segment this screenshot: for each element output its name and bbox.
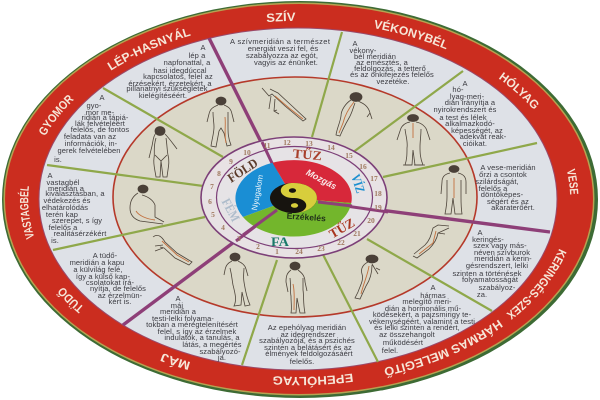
- text: hármas melegítő: működésért: [383, 338, 424, 347]
- text: epehólyag: [259, 323, 355, 366]
- figure: keringés arm: [413, 225, 449, 258]
- text: vese: ségért és az: [487, 197, 529, 206]
- text: hármas melegítő: felel.: [382, 346, 398, 355]
- text: hólyag: [433, 79, 507, 148]
- text: hólyag: nyirokrendszert és: [433, 105, 497, 114]
- text: gyomor: információk, in-: [65, 139, 118, 148]
- text: epehólyag: szinten a belátásért és az: [264, 343, 352, 352]
- text: vékonybél: bél meridián: [354, 52, 396, 61]
- hour numbers: 8: [217, 169, 221, 178]
- text: máj: testi-lelki folyama-: [152, 314, 214, 323]
- text: szív: vagyis az énünket.: [254, 58, 318, 67]
- text: vastagbél: is.: [51, 236, 59, 245]
- text: gyomor: gyo-: [86, 101, 102, 110]
- text: gyomor: feladata van az: [64, 132, 116, 141]
- text: máj: felel, s így az érzelmek: [158, 327, 236, 336]
- outer ring organ names: GYOMOR: [39, 95, 74, 135]
- outer ring organ names: VASTAGBÉL: [18, 186, 34, 240]
- figure: szív arm: [262, 88, 306, 121]
- text: szív: energiát veszi fel, és: [248, 44, 318, 53]
- hour numbers: 1: [275, 247, 279, 256]
- text: keringés-szex: szinten a történések: [452, 269, 522, 278]
- text: vastagbél: elhatárolódás: [42, 203, 88, 212]
- text: tüdő: az érzelmün-: [98, 291, 143, 300]
- text: vese: akaraterőért.: [491, 203, 535, 212]
- wedge: Érzékelés: [243, 198, 351, 237]
- text: vese: szilárdságát,: [475, 177, 519, 186]
- text: máj: szabályozó-: [199, 347, 241, 356]
- text: vékonybél: és az önkifejezés felelős: [350, 70, 434, 79]
- text: hólyag: lyag-meri-: [450, 92, 485, 101]
- text: gyomor: mor me-: [86, 108, 115, 117]
- text: vastagbél: felelős a: [49, 223, 78, 232]
- wedge: Mozgás: [272, 160, 352, 203]
- text: vese: A vese-meridián: [480, 163, 536, 172]
- element names: TŰZ: [326, 215, 357, 241]
- text: tüdő: nyítja, de felelős: [90, 284, 146, 293]
- text: hármas melegítő: A: [430, 283, 436, 292]
- text: hármas melegítő: és lelki szinten a rendért,: [374, 323, 460, 332]
- hour numbers: 5: [211, 210, 215, 219]
- text: gyomor: gerek felvételében: [57, 146, 121, 155]
- text: vékonybél: feldolgozás, a tetterő: [354, 64, 426, 73]
- element names: VÍZ: [348, 172, 368, 195]
- text: epehólyag: élmények feldolgozásáért: [265, 349, 354, 358]
- text: gyomor: lák felvételéért: [75, 119, 126, 128]
- text: hólyag: cióikat.: [463, 139, 487, 148]
- text: vékonybél: az emésztés, a: [356, 58, 409, 67]
- text: vékonybél: vezetéke.: [376, 77, 410, 86]
- text: vékonybél: vékony-: [350, 46, 377, 55]
- text: vese: felelős a: [479, 184, 508, 193]
- text: vastagbél: védekezés és: [43, 196, 91, 205]
- text: epehólyag: szabályozója, és a pszichés: [259, 336, 355, 345]
- element names: FÉM: [219, 196, 243, 224]
- hour numbers: 17: [370, 174, 378, 183]
- text: hólyag: a test és lélek: [439, 113, 487, 122]
- text: gyomor: is.: [54, 155, 62, 164]
- text: hármas melegítő: ködésekért, a pajzsmirigy te-: [373, 310, 472, 319]
- element ring: [216, 146, 372, 248]
- figure: gyomor: [149, 126, 177, 177]
- outer ring organ names: LÉP-HASNYÁL: [107, 28, 191, 70]
- text: hármas melegítő: dián a hormonális mű-: [385, 304, 462, 313]
- hour numbers: 23: [317, 244, 325, 253]
- hour numbers: 2: [256, 242, 260, 251]
- figure: epehólyag: [286, 262, 307, 313]
- text: gyomor: ridián a tápiá-: [82, 113, 129, 122]
- text: máj: indulatok, a tanulás, a: [164, 333, 240, 342]
- text: hólyag: képességét, az: [451, 126, 503, 135]
- hour numbers: 7: [210, 182, 214, 191]
- text: tüdő: a külvilág felé,: [73, 265, 123, 274]
- text: lép-hasnyál: érzésekért, érzetekért, a: [128, 79, 212, 88]
- text: lép-hasnyál: pillanatnyi szükségletek: [126, 84, 208, 93]
- text: vastagbél: terén kap: [46, 210, 78, 219]
- text: hólyag: dián irányítja a: [445, 98, 496, 107]
- panel: beige figure ring: [113, 77, 477, 317]
- hour numbers: 22: [337, 238, 345, 247]
- element names: FA: [271, 234, 290, 249]
- text: szív: A szívmeridián a természet: [230, 37, 331, 46]
- outer ring organ names: MÁJ: [160, 354, 190, 370]
- outer ring organ names: VÉKONYBÉL: [375, 20, 446, 50]
- text: máj: A: [175, 294, 181, 303]
- text: keringés-szex: meridián a kerin-: [474, 254, 532, 263]
- text: vastagbél: [42, 171, 107, 245]
- text: gyomor: felelős, de fontos: [71, 125, 129, 134]
- text: hólyag: adekvát reak-: [460, 132, 507, 141]
- text: keringés-szex: keringés-: [472, 235, 504, 244]
- hour numbers: 19: [374, 203, 382, 212]
- hour numbers: 13: [305, 139, 313, 148]
- hour numbers: 21: [353, 229, 361, 238]
- text: hólyag: A: [462, 79, 468, 88]
- text: epehólyag: az idegrendszer: [281, 330, 336, 339]
- hour numbers: 24: [295, 247, 303, 256]
- text: keringés-szex: szex vagy más-: [473, 241, 527, 250]
- text: hármas melegítő: [369, 283, 475, 355]
- text: gyomor: [54, 93, 129, 164]
- element names: FÖLD: [225, 155, 260, 186]
- text: szív: szabályozza az egót,: [246, 51, 318, 60]
- text: hármas melegítő: melegítő meri-: [402, 297, 452, 306]
- number ring: [201, 137, 387, 258]
- text: vékonybél: A: [352, 39, 358, 48]
- text: vékonybél: [350, 39, 434, 86]
- text: hármas melegítő: vékenységéért, valamint a testi: [369, 317, 475, 326]
- hour numbers: 6: [208, 197, 212, 206]
- text: tüdő: A tüdő-: [93, 251, 118, 260]
- text: lép-hasnyál: napfonattal, a: [164, 58, 211, 67]
- outer ring organ names: VESE: [567, 168, 578, 194]
- hour numbers: 12: [283, 138, 291, 147]
- figure: hólyag: [397, 114, 430, 165]
- element names: [219, 146, 368, 249]
- text: máj: meridián a: [160, 307, 197, 316]
- text: keringés-szex: folyamatosságát: [462, 275, 519, 284]
- text: hólyag: alkalmazkodó-: [445, 119, 495, 128]
- hour numbers: 4: [221, 223, 225, 232]
- text: epehólyag: Az epehólyag meridián: [268, 323, 346, 332]
- hour numbers: 3: [237, 234, 241, 243]
- text: vastagbél: kiválasztásban, a: [45, 189, 105, 198]
- spokes: green meridian dividers: [47, 32, 537, 365]
- text: lép-hasnyál: A: [200, 43, 206, 52]
- text: hármas melegítő: az összehangolt: [379, 330, 436, 339]
- outer ring organ names: SZÍV: [266, 10, 296, 22]
- text: máj: [146, 294, 242, 362]
- text: lép-hasnyál: kielégítéséért.: [139, 91, 187, 100]
- text: keringés-szex: gésrendszert, lelki: [466, 261, 528, 270]
- outer ring organ names: TÜDŐ: [56, 288, 82, 314]
- text: máj: máj: [171, 301, 183, 310]
- text: vastagbél: vastagbél: [46, 178, 80, 187]
- text: hármas melegítő: hármas: [420, 291, 446, 300]
- text: máj: ja.: [217, 353, 226, 362]
- text: tüdő: meridián a kapu: [70, 258, 124, 267]
- text: tüdő: csolatokat irá-: [86, 278, 134, 287]
- figure: vékonybél: [336, 92, 372, 136]
- text: máj: tokban a méregtelenítésért: [146, 320, 239, 329]
- text: lép-hasnyál: hasi idegdúccal: [153, 66, 207, 75]
- figure: vastagbél: [130, 185, 164, 224]
- text: szív: [230, 37, 331, 67]
- text: tüdő: kért is.: [109, 297, 131, 306]
- purple wedge dividers: [243, 202, 352, 235]
- hour numbers: 14: [327, 143, 335, 152]
- text: vese: őrzi a csontok: [479, 170, 527, 179]
- hour numbers: 9: [229, 157, 233, 166]
- wedge: Nyugalom: [235, 163, 294, 217]
- text: vastagbél: szerepet, s így: [52, 216, 102, 225]
- element names: TŰZ: [292, 146, 323, 163]
- figure: tüdő arm: [153, 235, 192, 265]
- text: gyomor: A: [99, 93, 105, 102]
- hour numbers: 11: [263, 141, 271, 150]
- text: vastagbél: realitásérzékért: [54, 229, 107, 238]
- text: keringés-szex: za.: [477, 290, 487, 299]
- text: vese: döntőképes-: [481, 190, 524, 199]
- wheel label: Nyugalom: Nyugalom: [250, 174, 265, 211]
- hour numbers: 10: [243, 148, 251, 157]
- outer ring organ names: HÓLYAG: [498, 72, 538, 109]
- figure: máj: [224, 253, 250, 306]
- outer ring organ names: HÁRMAS MELEGÍTŐ: [384, 320, 503, 378]
- text: lép-hasnyál: lép a: [189, 51, 206, 60]
- wheel label: Mozgás: Mozgás: [304, 167, 338, 192]
- icon: yin-yang: [268, 182, 319, 214]
- text: tüdő: így a külső kap-: [76, 272, 130, 281]
- text: tüdő: [70, 251, 146, 306]
- panel: text ring: [39, 28, 557, 370]
- center wheel: [235, 160, 352, 237]
- figure: vese: [441, 166, 466, 214]
- text: lép-hasnyál: kapcsolatos, felel az: [143, 72, 213, 81]
- text: vastagbél: A: [47, 171, 53, 180]
- purple spokes across the rings: [236, 142, 388, 241]
- text: keringés-szex: néven szívburok: [474, 248, 530, 257]
- hour numbers: [208, 138, 382, 256]
- hour numbers: 18: [374, 189, 382, 198]
- hour numbers: 16: [359, 162, 367, 171]
- text: máj: látás, a megértés: [182, 340, 242, 349]
- text: keringés-szex: [452, 228, 532, 299]
- text: epehólyag: felelős.: [290, 357, 314, 366]
- spokes: purple dividers: [123, 38, 550, 325]
- wheel label: Érzékelés: Érzékelés: [286, 211, 326, 223]
- text: hólyag: hó-: [452, 85, 464, 94]
- text: lép-hasnyál: [126, 43, 213, 100]
- text: vese: [475, 163, 536, 212]
- text: vastagbél: meridián a: [48, 184, 85, 193]
- text: keringés-szex: szabályoz-: [479, 283, 516, 292]
- hour numbers: 15: [345, 151, 353, 160]
- figure: hármas melegítő: [355, 255, 380, 299]
- figure: lép-hasnyál: [207, 97, 234, 147]
- outer ring organ names: EPEHÓLYAG: [273, 374, 353, 388]
- outer ring organ names: KERINGÉS-SZEX: [506, 249, 566, 320]
- hour numbers: 20: [367, 216, 375, 225]
- text: keringés-szex: A: [477, 228, 483, 237]
